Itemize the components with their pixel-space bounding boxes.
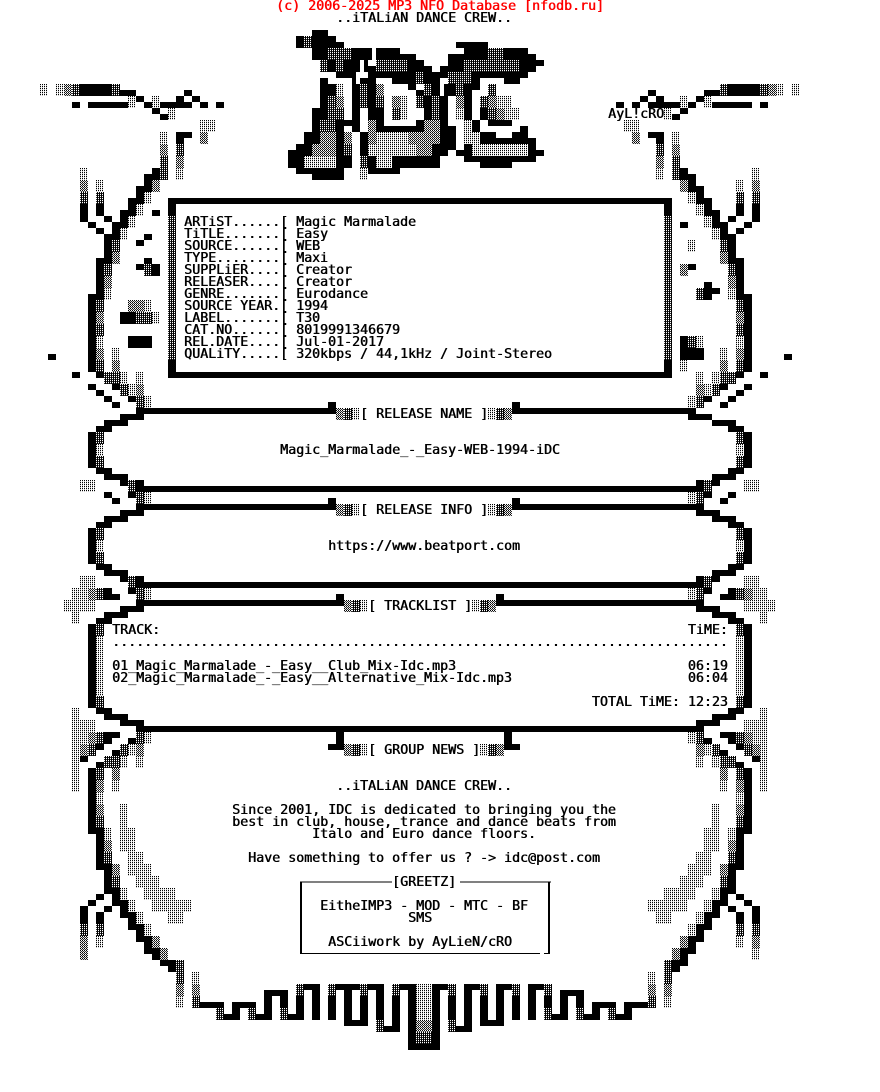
right wing art [616,84,800,408]
release details: ARTiST......[ Magic Marmalade TiTLE.......[ Easy SOURCE......[ WEB TYPE........[ Maxi SUPPLiER....[ Creator RELEASER....[ Creator GENRE.......[ Eurodance SOURCE YEAR.[ 1994 LABEL.......[ T30 CAT.NO......[ 8019991346679 REL.DATE....[ Jul-01-2017 QUALiTY.....[ 320kbps / 44,1kHz / Joint-Stereo [184,215,552,362]
release info panel frame [80,492,760,588]
logo: iDC block art [288,30,544,180]
release url: https://www.beatport.com [328,539,520,554]
release name: Magic_Marmalade_-_Easy-WEB-1994-iDC [280,443,560,458]
info panel frame [168,198,672,378]
greetz box border [300,881,551,954]
heading: tracklist: [ TRACKLIST ] [368,599,472,614]
release name panel frame [80,402,760,492]
heading: release info: [ RELEASE INFO ] [360,503,488,518]
group news panel frame [72,708,768,1008]
tracklist table: TRACK: TiME: ............................................................................. 01_Magic_Marmalade_-_Easy__Club_Mix-Idc.mp3 06:19 02_Magic_Marmalade_-_Easy__Alternative_Mix-Idc.mp3 06:04 TOTAL TiME: 12:23 [112,623,728,710]
group news text: ..iTALiAN DANCE CREW.. Since 2001, IDC is dedicated to bringing you the best in club, house, trance and dance beats from Italo and Euro dance floors. Have something to offer us ? -> idc@post.com [232,779,616,866]
tracklist panel frame [64,576,776,732]
heading: group news: [ GROUP NEWS ] [368,743,480,758]
bottom meander ornament [192,960,688,1050]
ascii artist tag: AyL!cRO [608,107,664,122]
heading: release name: [ RELEASE NAME ] [360,407,488,422]
greetz heading: [GREETZ] [392,875,456,890]
left wing art [40,84,224,408]
crew name: ..iTALiAN DANCE CREW.. [336,11,512,26]
greetz text: EitheIMP3 - MOD - MTC - BF SMS ASCiiwork by AyLieN/cRO [320,899,528,950]
